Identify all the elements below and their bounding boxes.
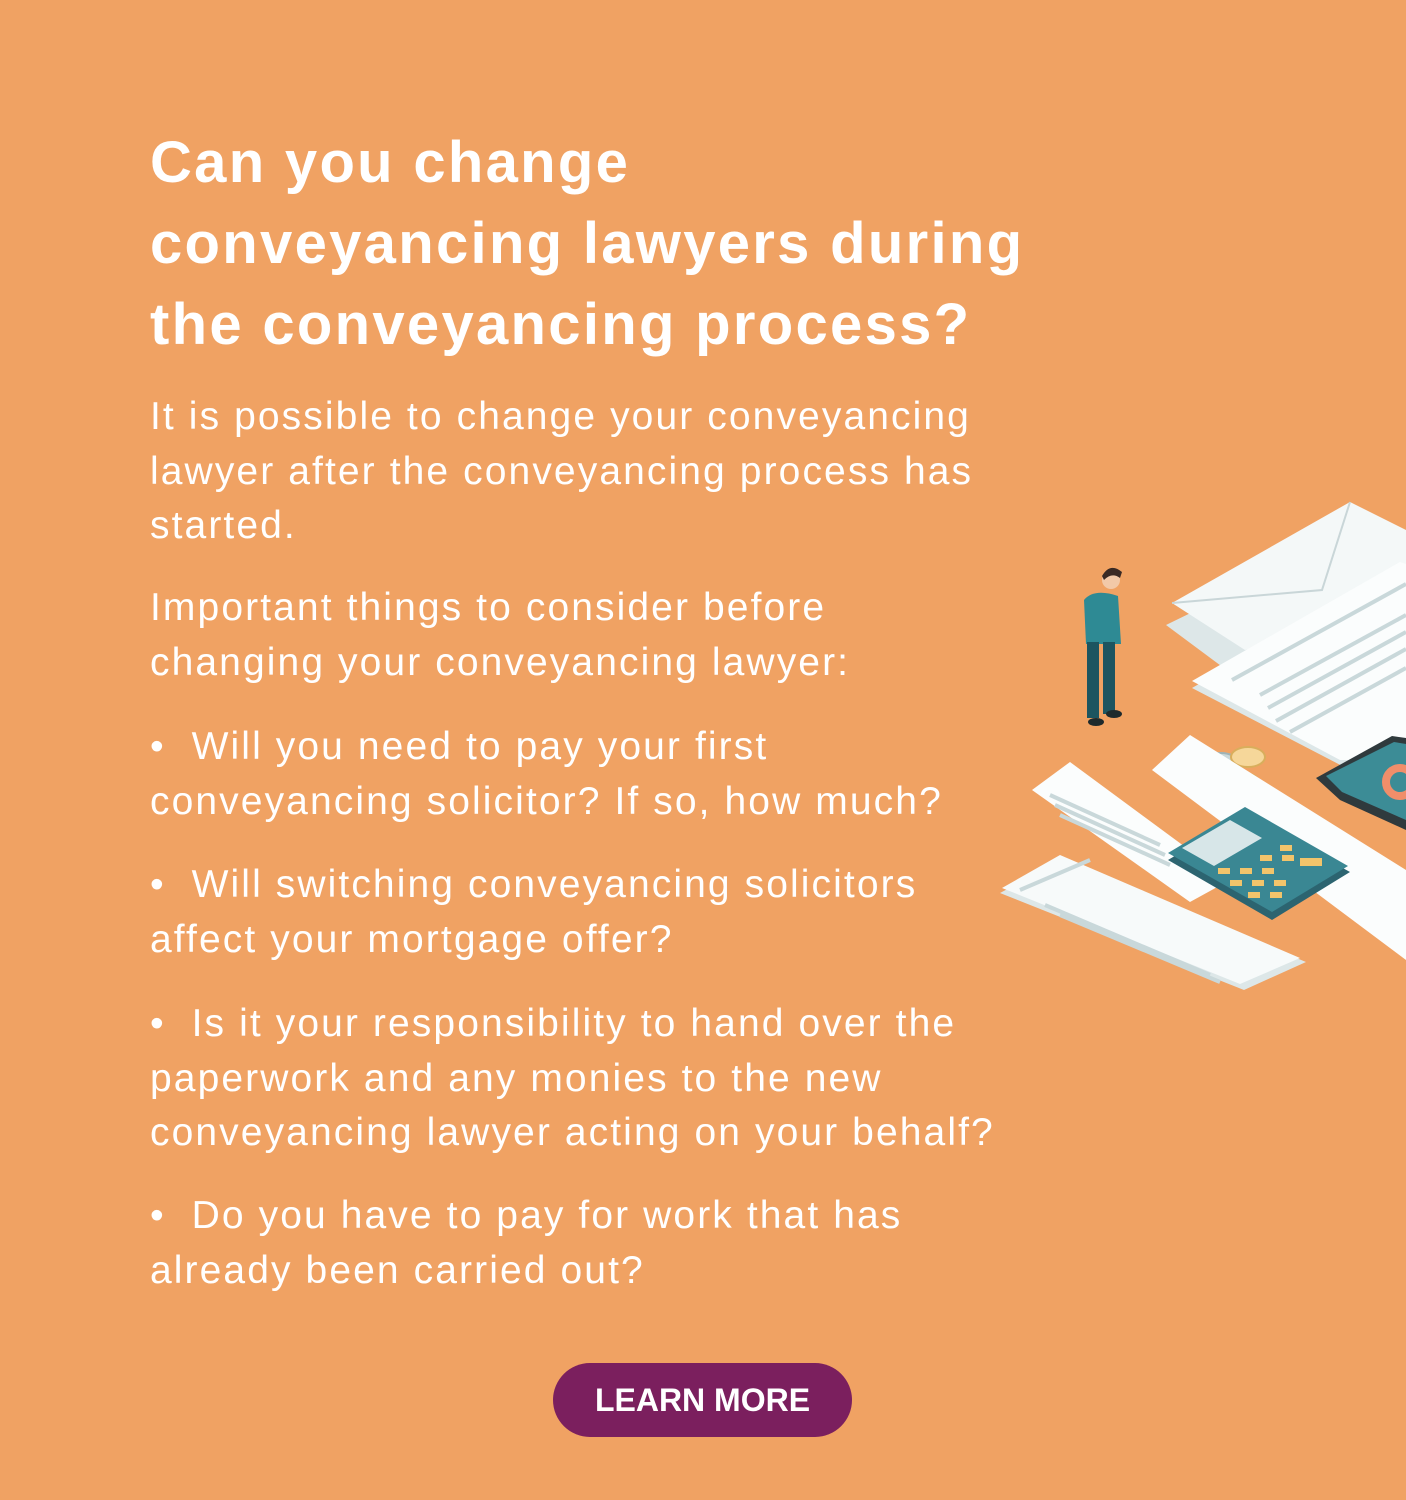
button: learn more [553, 1363, 852, 1437]
button: learn more: LEARN MORE [595, 1382, 810, 1418]
bullet 4 [150, 1194, 902, 1292]
receipts [1000, 735, 1406, 990]
bullet 2: • Will switching conveyancing solicitors [150, 863, 917, 906]
bullet 2 [150, 863, 917, 960]
bullet 2: affect your mortgage offer? [150, 918, 674, 960]
bullet 3 [150, 1002, 995, 1154]
paragraph: intro [150, 395, 973, 547]
bullet 3: conveyancing lawyer acting on your behalf? [150, 1111, 995, 1154]
bullet 4: already been carried out? [150, 1248, 645, 1292]
envelope [1166, 502, 1406, 680]
bullet 3: • Is it your responsibility to hand over the [150, 1002, 956, 1045]
paragraph: considerations: Important things to consider before [150, 586, 826, 629]
bullet 4: • Do you have to pay for work that has [150, 1194, 902, 1237]
paragraph: considerations [150, 586, 850, 684]
paragraph: intro: It is possible to change your conveyancing [150, 395, 971, 438]
title: conveyancing lawyers during [150, 211, 1024, 276]
man [1084, 568, 1122, 726]
paragraph: intro: started. [150, 504, 297, 547]
tablet [1316, 736, 1406, 830]
bullet 1: conveyancing solicitor? If so, how much? [150, 780, 943, 822]
bullet 1: • Will you need to pay your first [150, 725, 768, 768]
big document [1192, 562, 1406, 770]
paragraph: intro: lawyer after the conveyancing process has [150, 450, 973, 492]
bullet 3: paperwork and any monies to the new [150, 1056, 883, 1100]
paragraph: considerations: changing your conveyancing lawyer: [150, 640, 850, 684]
coins [1205, 747, 1265, 791]
title: Can you change [150, 130, 630, 195]
title: the conveyancing process? [150, 292, 971, 357]
bullet 1 [150, 725, 943, 822]
calculator [1168, 807, 1350, 920]
title [150, 130, 1024, 357]
